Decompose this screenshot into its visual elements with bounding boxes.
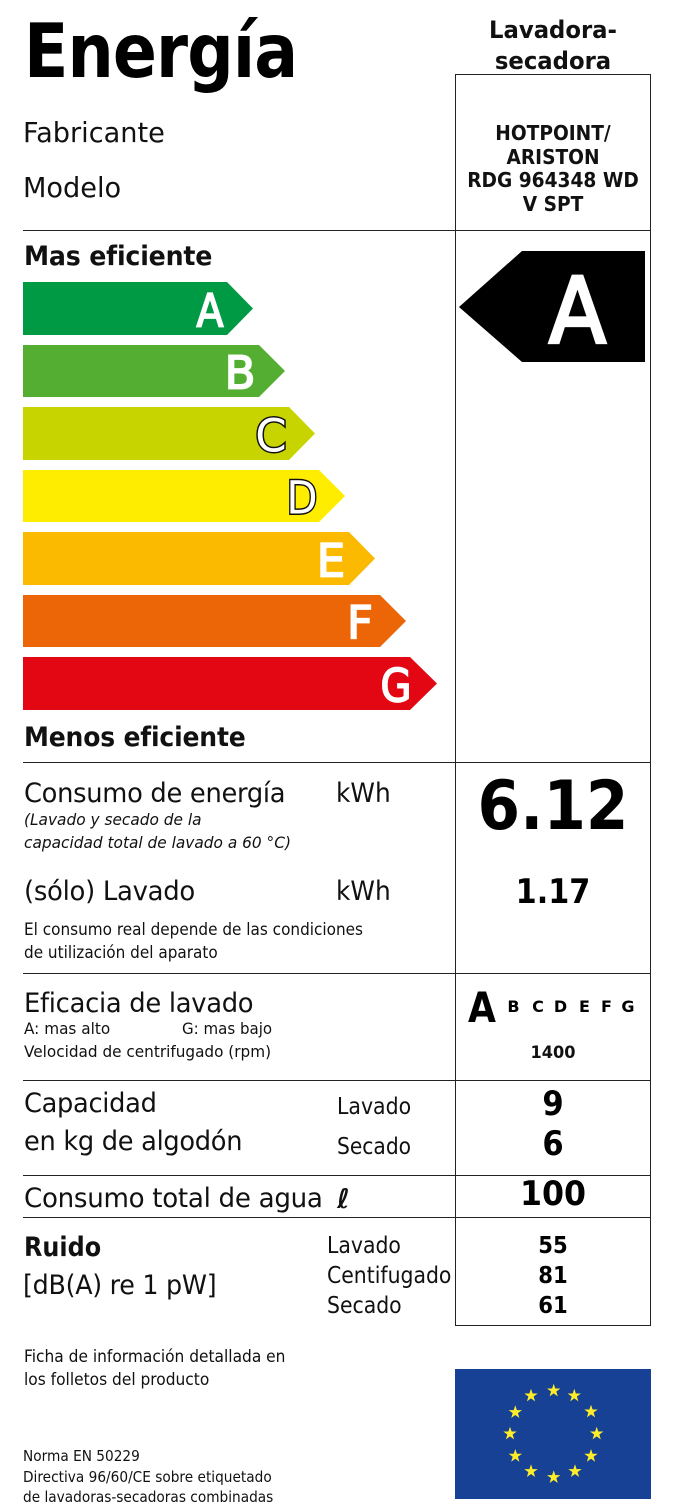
rating arrow A: A bbox=[549, 260, 606, 364]
noise mode labels: Centifugado bbox=[327, 1263, 451, 1289]
standards note: de lavadoras-secadoras combinadas bbox=[23, 1489, 273, 1506]
other letters: F bbox=[601, 997, 612, 1016]
other letters: C bbox=[532, 997, 544, 1016]
efficiency scale note: A: mas alto bbox=[24, 1019, 110, 1038]
consumption disclaimer: de utilización del aparato bbox=[24, 943, 218, 962]
capacity wash value: 9 bbox=[542, 1084, 564, 1124]
appliance type heading bbox=[489, 16, 617, 75]
class B arrow bbox=[23, 345, 285, 400]
manufacturer and model value: ARISTON bbox=[506, 144, 600, 168]
manufacturer and model value bbox=[467, 121, 639, 216]
energy consumption note bbox=[24, 810, 291, 852]
energy consumption note: capacidad total de lavado a 60 °C) bbox=[24, 833, 291, 852]
water consumption label: Consumo total de agua bbox=[24, 1183, 323, 1214]
class B arrow: B bbox=[225, 346, 255, 400]
consumption disclaimer bbox=[24, 920, 363, 962]
other letters: G bbox=[621, 997, 635, 1016]
class C arrow bbox=[23, 407, 315, 462]
least efficient heading: Menos eficiente bbox=[24, 722, 246, 753]
class D arrow: D bbox=[286, 472, 318, 524]
noise values: 81 bbox=[538, 1263, 568, 1289]
noise values: 55 bbox=[538, 1233, 568, 1259]
noise unit: [dB(A) re 1 pW] bbox=[23, 1270, 216, 1301]
class F arrow bbox=[23, 595, 406, 650]
noise heading: Ruido bbox=[24, 1232, 101, 1263]
product leaflet note: los folletos del producto bbox=[24, 1370, 209, 1389]
appliance type heading: secadora bbox=[495, 47, 611, 75]
standards note: Norma EN 50229 bbox=[23, 1448, 140, 1465]
capacity label: Capacidad bbox=[24, 1088, 157, 1119]
wash only unit: kWh bbox=[336, 876, 391, 907]
capacity label bbox=[24, 1088, 242, 1157]
wash only label: (sólo) Lavado bbox=[24, 876, 195, 907]
right column frame bbox=[455, 74, 651, 1326]
product leaflet note: Ficha de información detallada en bbox=[24, 1347, 285, 1366]
energy consumption label: Consumo de energía bbox=[24, 778, 285, 809]
class E arrow bbox=[23, 532, 375, 588]
spin speed label: Velocidad de centrifugado (rpm) bbox=[24, 1042, 271, 1061]
energy consumption note: (Lavado y secado de la bbox=[24, 810, 202, 829]
capacity dry value: 6 bbox=[542, 1124, 564, 1164]
consumption disclaimer: El consumo real depende de las condiciones bbox=[24, 920, 363, 939]
noise values bbox=[538, 1233, 568, 1319]
manufacturer label: Fabricante bbox=[23, 116, 165, 149]
selected letter: A bbox=[468, 982, 496, 1032]
other letters bbox=[507, 997, 635, 1016]
washing efficiency label: Eficacia de lavado bbox=[24, 988, 253, 1019]
most efficient heading: Mas eficiente bbox=[24, 241, 212, 272]
class C arrow: C bbox=[255, 410, 287, 462]
manufacturer and model value: RDG 964348 WD bbox=[467, 168, 639, 192]
title: Energía bbox=[24, 6, 297, 94]
spin speed value: 1400 bbox=[531, 1043, 575, 1063]
class A arrow: A bbox=[196, 284, 224, 338]
manufacturer and model value: HOTPOINT/ bbox=[495, 121, 611, 145]
appliance type heading: Lavadora- bbox=[489, 16, 617, 44]
rating arrow A bbox=[459, 251, 645, 364]
energy class scale bbox=[23, 282, 437, 712]
class F arrow: F bbox=[347, 596, 373, 650]
class G arrow: G bbox=[380, 660, 412, 712]
litre symbol: ℓ bbox=[337, 1184, 350, 1215]
noise mode labels bbox=[327, 1233, 451, 1319]
manufacturer and model value: V SPT bbox=[523, 192, 583, 216]
wash only value: 1.17 bbox=[516, 872, 590, 912]
class D arrow bbox=[23, 470, 345, 524]
other letters: B bbox=[507, 997, 520, 1016]
capacity dry label: Secado bbox=[337, 1134, 411, 1160]
capacity label: en kg de algodón bbox=[24, 1126, 242, 1157]
energy value: 6.12 bbox=[477, 767, 629, 846]
other letters: E bbox=[579, 997, 590, 1016]
water value: 100 bbox=[520, 1174, 586, 1214]
model label: Modelo bbox=[23, 171, 121, 204]
noise values: 61 bbox=[538, 1293, 568, 1319]
noise mode labels: Secado bbox=[327, 1293, 402, 1319]
other letters: D bbox=[554, 997, 567, 1016]
class E arrow: E bbox=[317, 534, 345, 588]
product leaflet note bbox=[24, 1347, 285, 1389]
efficiency scale low note: G: mas bajo bbox=[182, 1019, 272, 1038]
class G arrow bbox=[23, 657, 437, 712]
washing efficiency letters bbox=[468, 982, 635, 1032]
class A arrow bbox=[23, 282, 253, 338]
standards note: Directiva 96/60/CE sobre etiquetado bbox=[23, 1468, 272, 1486]
energy unit: kWh bbox=[336, 778, 391, 809]
capacity wash label: Lavado bbox=[337, 1094, 411, 1120]
icon: EU flag bbox=[455, 1369, 651, 1499]
noise mode labels: Lavado bbox=[327, 1233, 401, 1259]
standards note bbox=[23, 1448, 273, 1506]
